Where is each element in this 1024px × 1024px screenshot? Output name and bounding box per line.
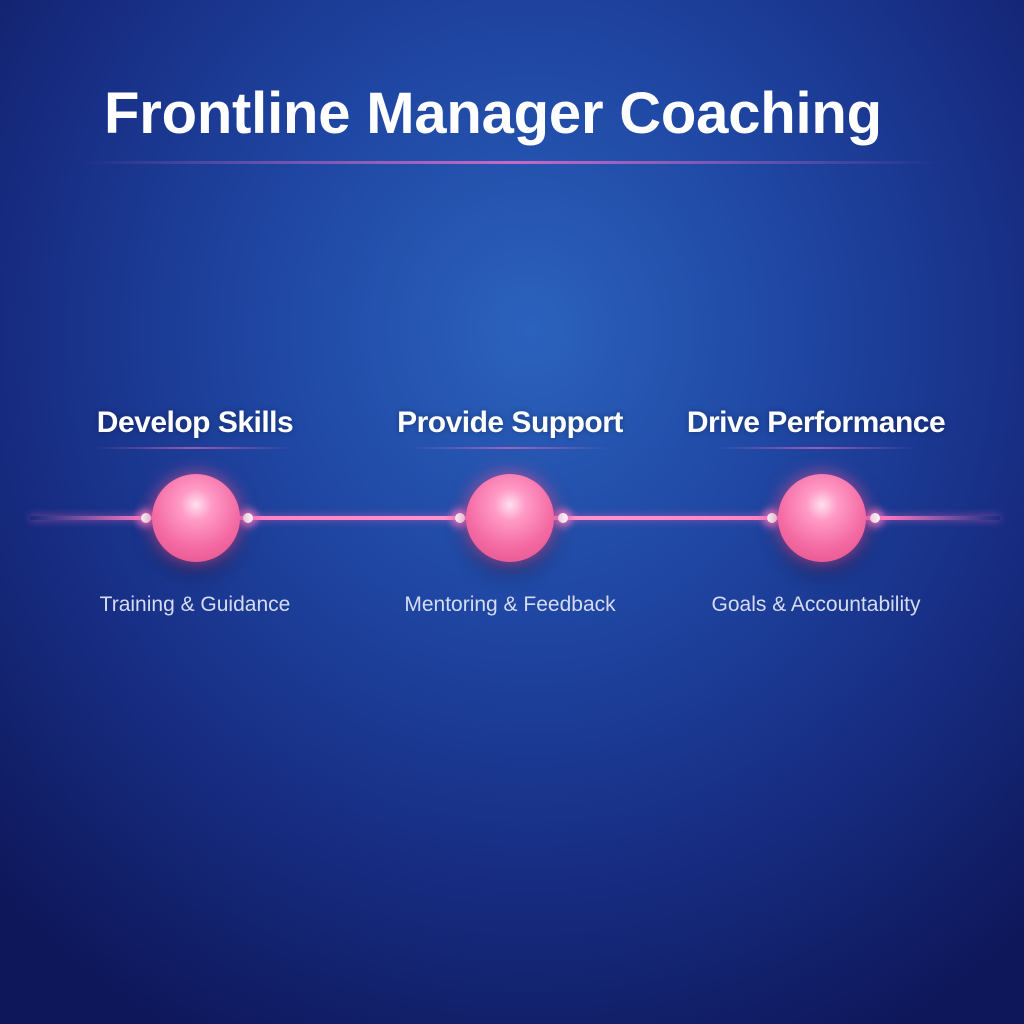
step 2 [396, 406, 624, 616]
heading: Provide Support: Provide Support [397, 406, 623, 439]
title: Frontline Manager Coaching [104, 81, 882, 146]
step 1 [96, 406, 294, 616]
sphere 3 [778, 474, 866, 562]
subtitle 3: Goals & Accountability [712, 593, 920, 616]
sphere 2 [466, 474, 554, 562]
heading: Drive Performance: Drive Performance [687, 406, 945, 439]
subtitle 2: Mentoring & Feedback [404, 593, 616, 616]
timeline line [30, 516, 1000, 520]
step 3 [686, 406, 946, 616]
sphere 1 [152, 474, 240, 562]
heading: Develop Skills: Develop Skills [97, 406, 293, 439]
subtitle 1: Training & Guidance [100, 593, 290, 616]
